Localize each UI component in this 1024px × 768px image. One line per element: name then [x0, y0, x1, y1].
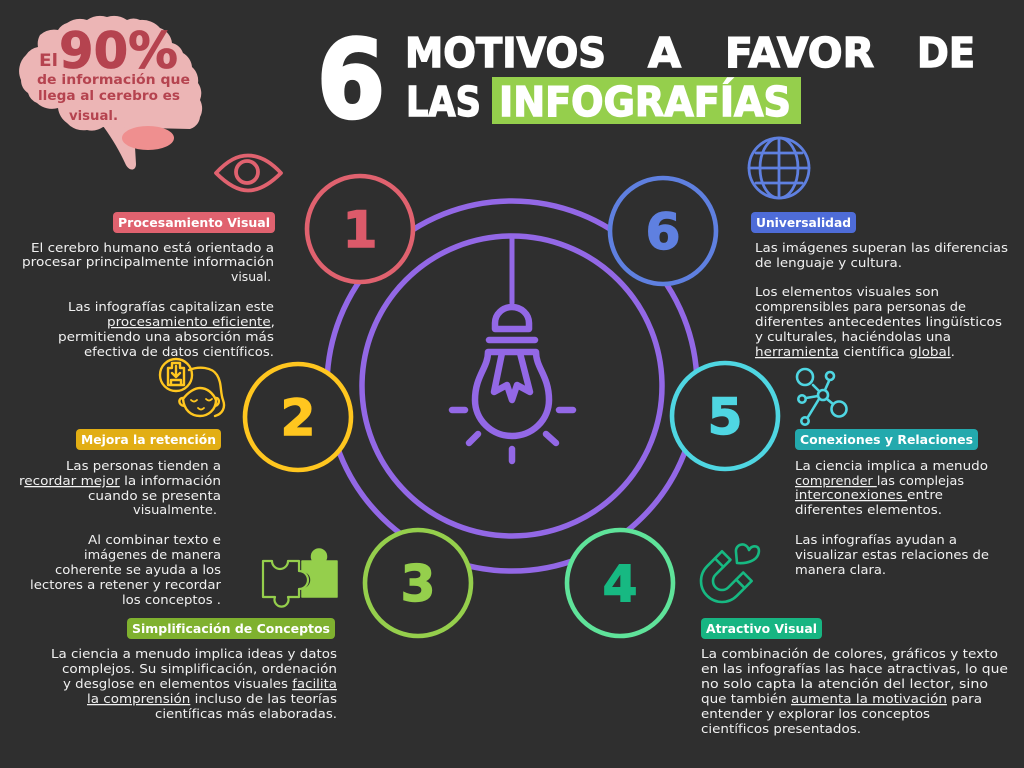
text 2: Las personas tienden a	[66, 458, 221, 473]
label 4	[701, 618, 822, 639]
brain callout	[19, 16, 202, 170]
text 5: La ciencia implica a menudo	[795, 458, 988, 473]
text 3: complejos. Su simplificación, ordenación	[62, 661, 337, 676]
text 4: entender y explorar los conceptos	[701, 706, 930, 721]
text 1: permitiendo una absorción más	[58, 329, 274, 344]
icon: eye	[216, 156, 281, 190]
text 6: Las imágenes superan las diferencias	[755, 240, 1008, 255]
text 1: procesamiento eficiente ,	[107, 314, 275, 329]
text 5: manera clara.	[795, 562, 886, 577]
text 5: interconexiones entre	[795, 487, 943, 502]
circle 2	[245, 364, 351, 470]
brain callout: de información que	[37, 72, 190, 88]
text 3: la comprensión incluso de las teorías	[87, 691, 337, 706]
text 4: no solo capta la atención del lector, sino	[701, 676, 988, 691]
text 4: que también aumenta la motivación para	[701, 691, 982, 706]
text 5: visualizar estas relaciones de	[795, 547, 989, 562]
panel 2: mejora la retención	[19, 429, 222, 607]
panel 3: simplificación de conceptos	[51, 618, 337, 721]
circle 6: 6	[646, 203, 680, 261]
panel 4: atractivo visual	[701, 618, 1008, 736]
text 1	[22, 240, 275, 359]
icon: head with memory	[160, 359, 224, 416]
text 3: científicas más elaboradas.	[155, 706, 337, 721]
title: INFOGRAFÍAS	[499, 78, 791, 126]
brain callout: llega al cerebro es	[38, 88, 180, 104]
title	[317, 18, 975, 143]
text 2: los conceptos .	[122, 592, 221, 607]
text 1: Las infografías capitalizan este	[68, 299, 274, 314]
text 4: La combinación de colores, gráficos y texto	[701, 646, 998, 661]
text 6	[755, 240, 1008, 359]
circle 6	[610, 178, 716, 284]
text 2: coherente se ayuda a los	[55, 562, 221, 577]
text 4: científicos presentados.	[701, 721, 861, 736]
label 2	[76, 429, 221, 450]
label 1	[113, 212, 275, 233]
title: LAS	[406, 78, 481, 126]
circle 4: 4	[603, 555, 637, 613]
text 2: recordar mejor la información	[19, 473, 221, 488]
text 2: cuando se presenta	[88, 488, 221, 503]
label 5	[795, 429, 978, 450]
text 4	[701, 646, 1008, 736]
text 6: diferentes antecedentes lingüísticos	[755, 314, 1002, 329]
text 3: La ciencia a menudo implica ideas y datos	[51, 646, 337, 661]
label 6	[751, 212, 856, 233]
text 2: visualmente.	[133, 502, 217, 517]
brain callout: 90%	[59, 22, 178, 80]
label 3	[127, 618, 335, 639]
brain callout: El	[39, 51, 58, 71]
panel 1: procesamiento visual	[22, 212, 275, 359]
icon: globe	[749, 138, 809, 198]
title: MOTIVOS	[405, 29, 606, 77]
label 5: Conexiones y Relaciones	[800, 432, 973, 447]
text 4: en las infografías las hace atractivas, lo que	[701, 661, 1008, 676]
text 5: comprender las complejas	[795, 473, 964, 488]
icon: light bulb	[452, 236, 573, 461]
circle 5	[672, 363, 778, 469]
circle 2: 2	[281, 389, 315, 447]
icon: magnet and heart	[692, 544, 759, 611]
text 1: El cerebro humano está orientado a	[31, 240, 274, 255]
text 2: lectores a retener y recordar	[30, 577, 222, 592]
text 2: imágenes de manera	[84, 547, 221, 562]
text 3	[51, 646, 337, 721]
text 5	[795, 458, 989, 577]
circle 3: 3	[401, 555, 435, 613]
panel 6: universalidad	[751, 212, 1008, 359]
label 4: Atractivo Visual	[706, 621, 817, 636]
panel 5: conexiones y relaciones	[795, 429, 989, 577]
circle 4	[567, 530, 673, 636]
circle 3	[365, 530, 471, 636]
text 3: y desglose en elementos visuales facilita	[63, 676, 337, 691]
text 6: y culturales, haciéndolas una	[755, 329, 951, 344]
label 1: Procesamiento Visual	[118, 215, 270, 230]
icon: puzzle	[263, 549, 337, 607]
brain callout: visual.	[69, 108, 118, 124]
text 6: Los elementos visuales son	[755, 284, 939, 299]
text 6: de lenguaje y cultura.	[755, 255, 902, 270]
text 2: Al combinar texto e	[88, 532, 221, 547]
circle 1: 1	[343, 201, 377, 259]
text 5: Las infografías ayudan a	[795, 532, 957, 547]
text 5: diferentes elementos.	[795, 502, 942, 517]
title: 6	[317, 18, 385, 143]
circle 1	[307, 176, 413, 282]
icon: molecule network	[797, 369, 846, 425]
label 2: Mejora la retención	[81, 432, 216, 447]
text 2	[19, 458, 222, 607]
text 6: herramienta científica global.	[755, 344, 955, 359]
text 1: visual.	[231, 269, 271, 284]
title: DE	[917, 29, 975, 77]
text 1: efectiva de datos científicos.	[84, 344, 274, 359]
title: A	[648, 29, 681, 77]
central rings	[327, 201, 697, 571]
text 1: procesar principalmente información	[22, 254, 274, 269]
circle 5: 5	[708, 388, 742, 446]
title: FAVOR	[725, 29, 874, 77]
label 3: Simplificación de Conceptos	[132, 621, 330, 636]
text 6: comprensibles para personas de	[755, 299, 966, 314]
label 6: Universalidad	[756, 215, 851, 230]
